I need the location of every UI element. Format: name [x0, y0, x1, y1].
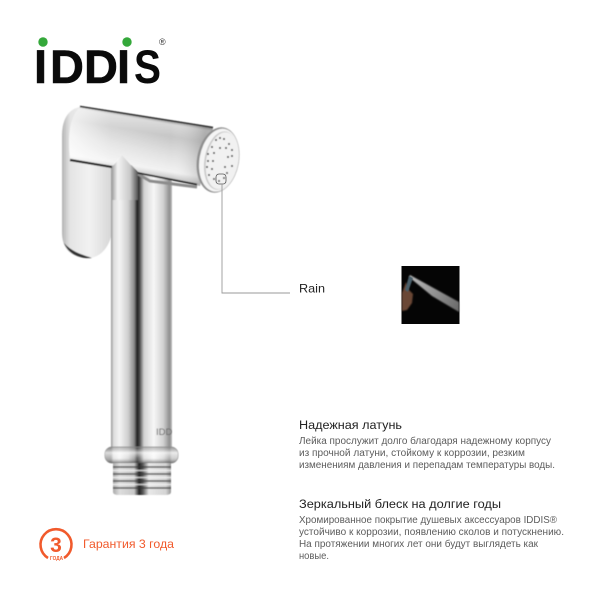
shower in hand [405, 276, 413, 292]
text block: mirror shine [299, 497, 564, 562]
lever lower rim [64, 243, 92, 258]
spray beam [409, 275, 459, 312]
hand [402, 282, 413, 311]
body: устойчиво к коррозии, появлению сколов и потускнению. [299, 527, 564, 538]
logo wordmark: D [50, 40, 84, 93]
text block: brass body [299, 418, 555, 471]
head top highlight line [80, 106, 213, 128]
flange [105, 447, 178, 463]
body: Лейка прослужит долго благодаря надежному корпусу [299, 435, 551, 447]
stem [111, 165, 172, 450]
badge caption: ГОДА [50, 556, 63, 562]
shower head body [69, 107, 213, 186]
warranty badge [40, 529, 72, 562]
heading: Зеркальный блеск на долгие годы [299, 497, 501, 511]
logo registered mark: ® [159, 37, 166, 47]
logo wordmark: D [84, 40, 118, 93]
badge number: 3 [50, 534, 62, 557]
shower face [192, 124, 244, 196]
body [299, 435, 555, 471]
callout: spray type marker and leader line [216, 174, 290, 293]
threaded connector [113, 463, 171, 495]
warranty text: Гарантия 3 года [83, 537, 174, 551]
body: изменениям давления и перепадам температуры воды. [299, 460, 555, 471]
product: chrome hand shower [62, 106, 244, 495]
marker around nozzle [216, 174, 226, 184]
logo wordmark: I [34, 40, 47, 93]
lever top dark line [70, 160, 112, 167]
body: новые. [299, 551, 329, 562]
head underside dark line [138, 174, 197, 187]
photo background [402, 266, 460, 324]
logo letter S: S [134, 40, 161, 93]
leader line [222, 184, 290, 293]
stem logo: IDDIS [156, 427, 181, 438]
body: из прочной латуни, стойкому к коррозии, резким [299, 448, 525, 459]
photo: rain spray on black [402, 266, 460, 324]
logo wordmark: I [117, 40, 130, 93]
neck flare [111, 155, 138, 200]
label: Rain: Rain [299, 282, 325, 296]
badge ring [40, 529, 72, 558]
head horizontal shading [69, 107, 213, 186]
body: На протяжении многих лет они будут выглядеть как [299, 538, 539, 550]
shower holes [206, 137, 233, 182]
body [299, 515, 564, 562]
heading: Надежная латунь [299, 418, 402, 432]
logo: IDDIS [34, 37, 166, 93]
lever shell [62, 107, 112, 258]
logo green dot, first I [38, 37, 48, 47]
body: Хромированное покрытие душевых аксессуаров IDDIS® [299, 515, 558, 526]
logo green dot, second I [122, 37, 132, 47]
